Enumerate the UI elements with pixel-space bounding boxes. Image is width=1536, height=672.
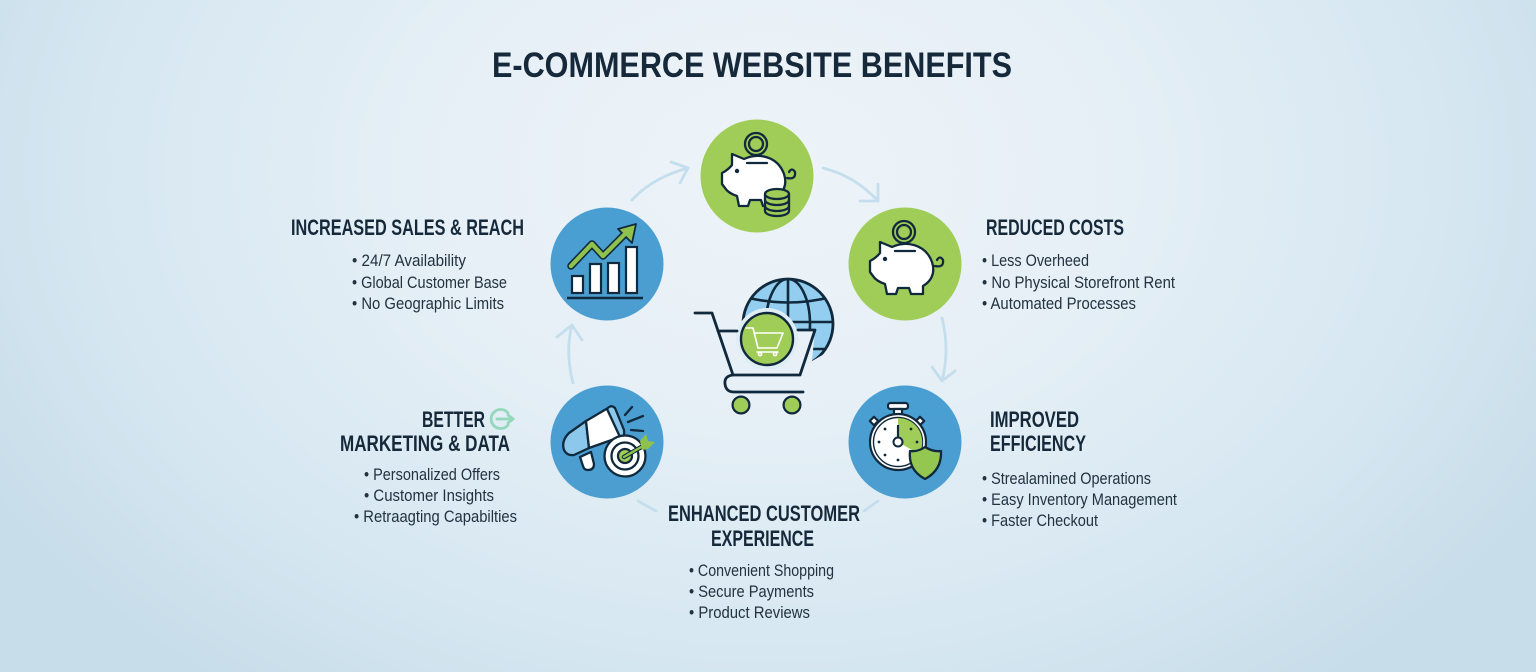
bullet list: • No Physical Storefront Rent [982, 273, 1175, 292]
bullet list: • Less Overheed [982, 251, 1089, 270]
bullet list: • Easy Inventory Management [982, 490, 1177, 509]
bullet list: • Strealamined Operations [982, 469, 1151, 488]
bullet list: • No Geographic Limits [352, 294, 504, 313]
heading: REDUCED COSTS [986, 215, 1124, 240]
bullet list [352, 251, 507, 313]
bullet list [982, 251, 1175, 313]
heading: EXPERIENCE [711, 526, 814, 551]
icon: small teal key mark [491, 410, 513, 428]
bullet list: • 24/7 Availability [352, 251, 466, 270]
heading: ENHANCED CUSTOMER [668, 501, 860, 526]
arrow: bottom right [864, 501, 878, 511]
arrow: bottom left [638, 501, 656, 511]
heading: IMPROVED [990, 407, 1079, 432]
panel: better marketing and data [340, 407, 517, 526]
arrow: right [932, 318, 955, 381]
bullet list: • Global Customer Base [352, 273, 507, 292]
bullet list: • Convenient Shopping [689, 561, 834, 580]
heading: INCREASED SALES & REACH [291, 215, 524, 240]
icon: growth chart [550, 208, 664, 320]
panel: improved efficiency [982, 407, 1177, 530]
bullet list: • Automated Processes [982, 294, 1136, 313]
heading: BETTER [422, 407, 485, 432]
panel: reduced costs [982, 215, 1175, 313]
bullet list [982, 469, 1177, 530]
title: E-COMMERCE WEBSITE BENEFITS [492, 45, 1012, 85]
bullet list: • Secure Payments [689, 582, 814, 601]
bullet list: • Customer Insights [364, 486, 494, 505]
panel: increased sales and reach [291, 215, 524, 313]
bullet list: • Product Reviews [689, 603, 810, 622]
arrow: top left [632, 162, 688, 200]
bullet list [689, 561, 834, 622]
icon: megaphone and target [550, 386, 664, 498]
icon: stopwatch and shield [848, 386, 962, 498]
icon: savings piggy bank with coin stack [700, 120, 814, 232]
panel: enhanced customer experience [668, 501, 860, 622]
heading [990, 407, 1086, 456]
bullet list: • Retraagting Capabilties [354, 507, 517, 526]
heading [668, 501, 860, 551]
arrow: left [557, 325, 582, 383]
bullet list [354, 465, 517, 526]
icon: piggy bank [848, 208, 962, 320]
heading [340, 407, 510, 456]
icon: central cart with globe [695, 279, 833, 413]
bullet list: • Personalized Offers [364, 465, 500, 484]
heading: MARKETING & DATA [340, 431, 510, 456]
arrow: top right [823, 168, 878, 201]
bullet list: • Faster Checkout [982, 511, 1098, 530]
heading: EFFICIENCY [990, 431, 1086, 456]
